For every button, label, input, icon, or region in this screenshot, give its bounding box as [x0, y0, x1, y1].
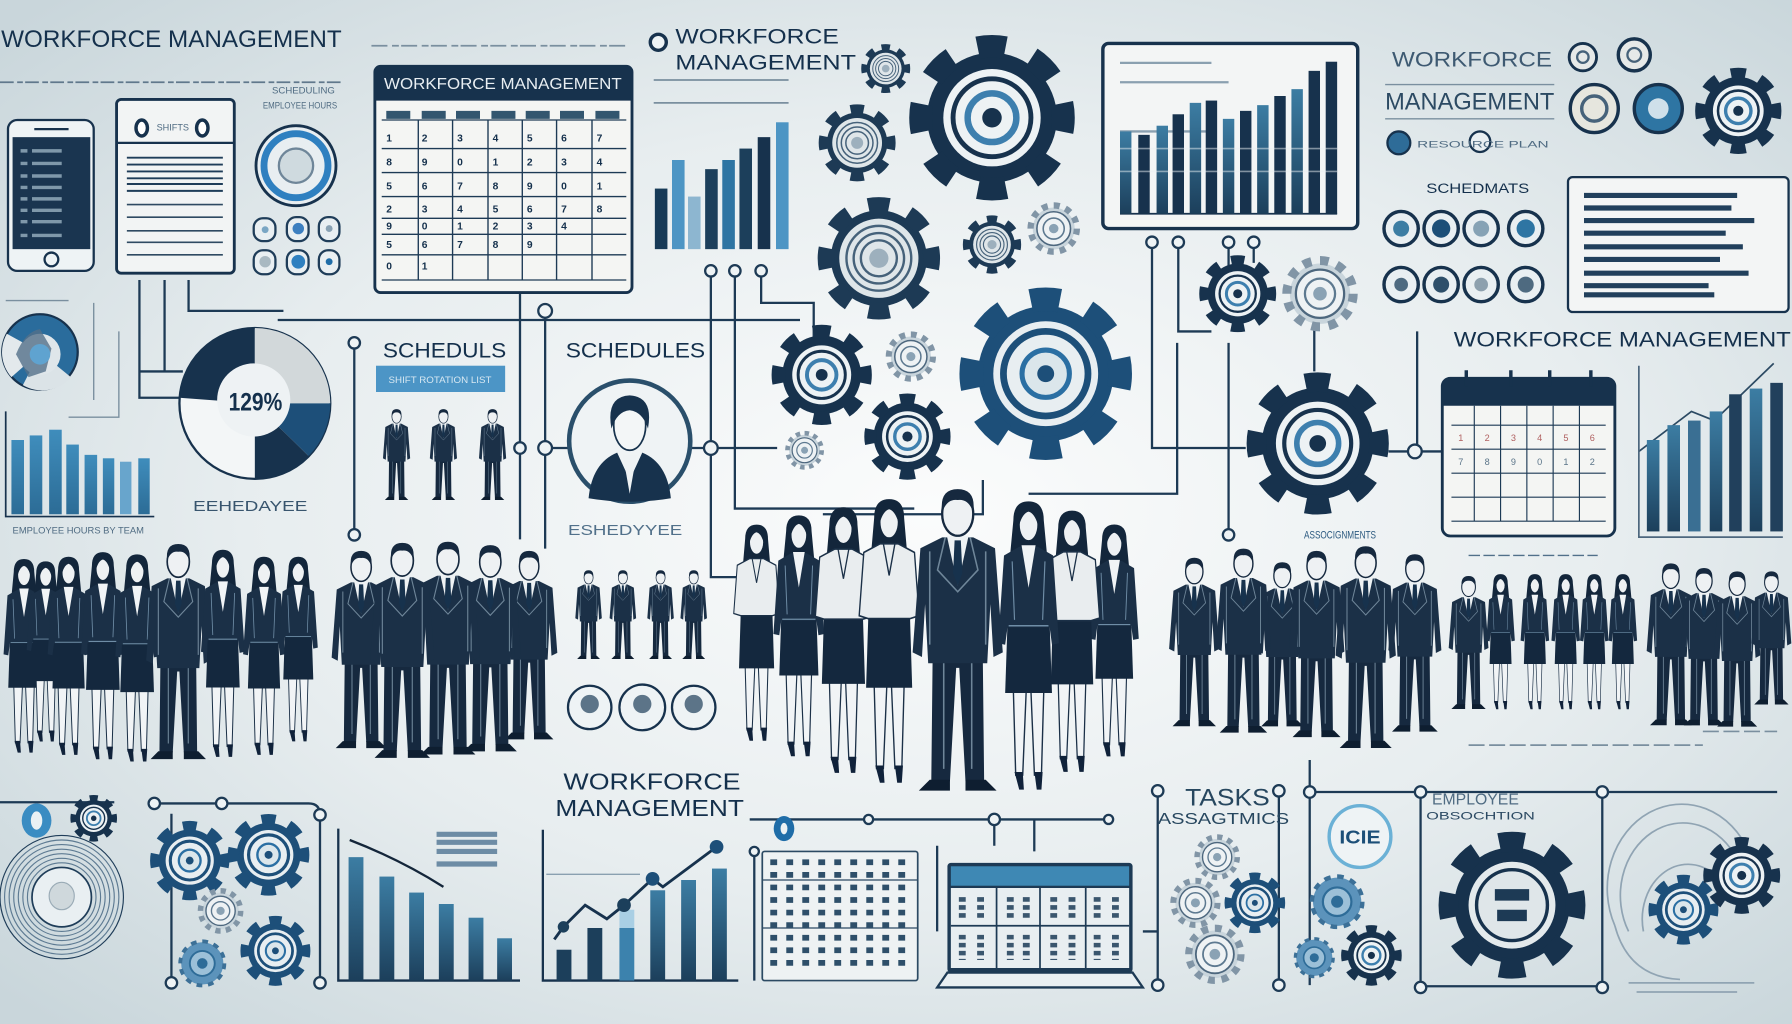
calendar: workforce management: 1234567	[386, 134, 603, 145]
icons: top right gears: RESOURCE PLAN	[1417, 139, 1549, 149]
calendar: right: 123456	[1458, 433, 1595, 443]
heading: schedule with badge: SHIFT ROTATION LIST	[389, 375, 492, 385]
calendar: workforce management: 01	[386, 262, 428, 273]
people: small men row	[575, 570, 707, 659]
calendar: right	[1442, 370, 1615, 536]
title: top right: WORKFORCE	[1392, 46, 1552, 71]
pie: small left	[2, 314, 78, 390]
icon: concentric dial	[0, 835, 123, 959]
calendar: workforce management: 5678901	[386, 182, 603, 193]
calendar: workforce management: 901234	[386, 222, 567, 233]
title: top right: MANAGEMENT	[1385, 89, 1555, 116]
bar chart: falling	[338, 829, 520, 981]
title: top right	[1385, 46, 1555, 119]
gear: large blue hub	[971, 299, 1120, 448]
bar chart: top center	[654, 80, 789, 249]
title: bottom center	[555, 769, 744, 821]
icon grid: circular badges	[1384, 211, 1543, 302]
donut value: 129%	[229, 388, 282, 416]
gears: right swoosh	[1607, 804, 1775, 992]
panel: horizontal bars	[1568, 177, 1789, 312]
gears: tasks cluster	[1173, 837, 1398, 982]
people: left team	[4, 544, 318, 762]
avatar: employee portrait	[569, 381, 690, 502]
heading: tasks assignments: TASKS	[1185, 785, 1270, 812]
label: eshedyyee: ESHEDYYEE	[568, 523, 682, 539]
title: right: WORKFORCE MANAGEMENT	[1454, 326, 1791, 351]
calendar: right: 789012	[1458, 457, 1595, 467]
document panel	[117, 99, 234, 273]
heading: schedules: SCHEDULES	[566, 338, 705, 363]
title: top center: WORKFORCE	[675, 23, 839, 48]
man: central leader	[913, 489, 1003, 791]
title: top center	[650, 23, 856, 75]
calendar: workforce management: WORKFORCE MANAGEMENT	[384, 76, 622, 93]
people: three small men	[383, 409, 506, 500]
label: assignments: ASSOCIGNMENTS	[1304, 529, 1376, 541]
laptop: dashboard	[937, 863, 1143, 987]
heading: schedule with badge: SCHEDULS	[383, 338, 506, 363]
icon grid: six small buttons	[254, 217, 339, 274]
connector lines	[0, 237, 1777, 993]
calendar: workforce management: 56789	[386, 240, 533, 251]
calendar: workforce management: 8901234	[386, 158, 603, 169]
people: second team men	[332, 542, 557, 758]
icon: target ring	[256, 126, 336, 206]
heading: employee: OBSOCHTION	[1426, 810, 1535, 822]
title: top center: MANAGEMENT	[675, 50, 856, 75]
people: central team	[734, 489, 1139, 791]
calendar: workforce management	[375, 66, 632, 293]
gears: central cluster	[778, 46, 1379, 505]
title: top left: WORKFORCE MANAGEMENT	[1, 26, 342, 53]
heading: employee	[1426, 792, 1535, 822]
icon: ring badge: ICIE	[1339, 826, 1381, 847]
bar chart: rising with trend line	[543, 830, 738, 981]
heading: tasks assignments: ASSAGTMICS	[1158, 811, 1289, 828]
caption: under left chart: EMPLOYEE HOURS BY TEAM	[13, 526, 144, 536]
gear: large employee gear	[1449, 842, 1575, 969]
gear: small upper left	[824, 110, 890, 176]
bar chart: right with trend	[1639, 363, 1783, 537]
donut chart	[179, 328, 330, 479]
table panel	[762, 851, 918, 981]
gear: large target	[921, 46, 1063, 189]
icons: top right gears	[1387, 39, 1775, 154]
calendar: workforce management: 2345678	[386, 205, 603, 216]
title: bottom center: WORKFORCE	[563, 769, 741, 795]
caption strip: top left	[0, 46, 629, 111]
avatars: three round portraits	[568, 685, 715, 730]
people: far right team	[1449, 563, 1791, 727]
icon: phone	[8, 120, 94, 271]
gear: medium	[826, 205, 932, 311]
gears: bottom left	[22, 798, 306, 986]
icon: blue badge	[774, 816, 794, 841]
caption strip: top left: EMPLOYEE HOURS	[263, 101, 337, 111]
document panel: SHIFTS	[157, 122, 189, 132]
caption strip: top left: SCHEDULING	[272, 86, 335, 96]
heading: tasks assignments	[1158, 785, 1289, 828]
man: team lead	[146, 544, 210, 759]
bar chart: left	[6, 411, 154, 517]
people: right team men	[1169, 546, 1441, 748]
monitor: bar chart	[1103, 43, 1358, 229]
label: schedmats: SCHEDMATS	[1426, 181, 1529, 196]
title: bottom center: MANAGEMENT	[555, 795, 744, 821]
label: eehedayee: EEHEDAYEE	[193, 499, 308, 515]
heading: schedule with badge	[376, 338, 506, 392]
icon: ring badge	[1329, 806, 1391, 867]
heading: employee: EMPLOYEE	[1432, 792, 1519, 809]
caption: above far right team	[1469, 555, 1777, 745]
